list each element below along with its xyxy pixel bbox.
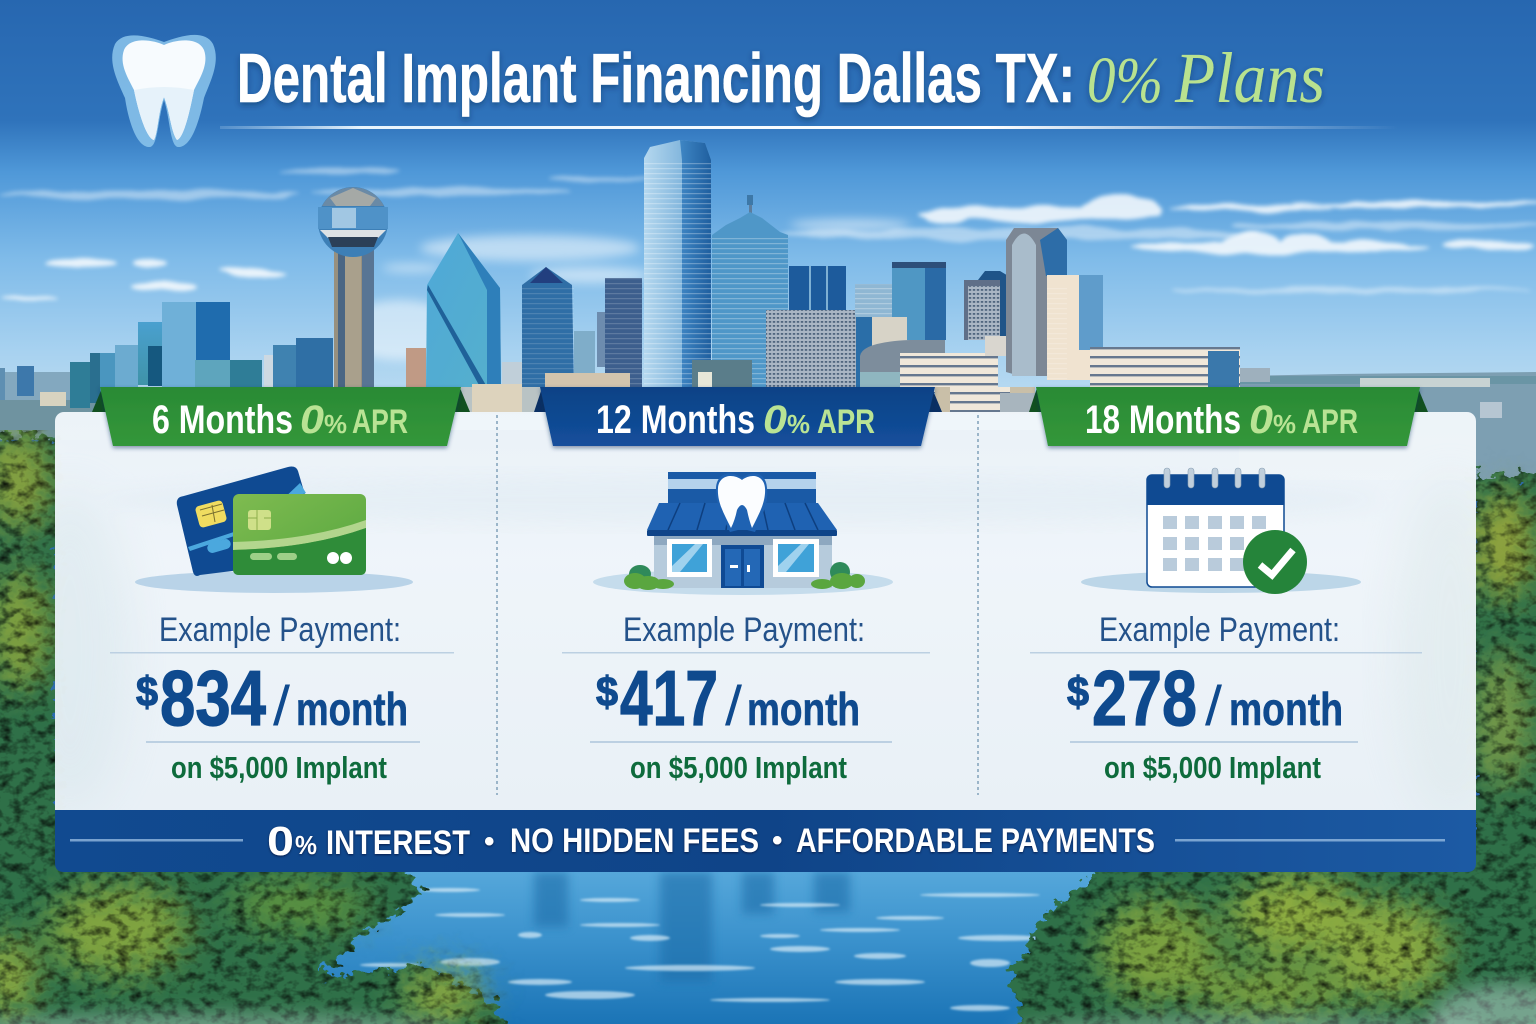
banner text: •	[484, 825, 495, 858]
plan 2 payment text: month	[747, 683, 860, 735]
banner text: •	[772, 824, 783, 857]
banner text	[267, 818, 1155, 864]
ribbon: 12 months: %	[787, 409, 810, 439]
building: Reunion Tower	[318, 187, 388, 387]
plan 1 payment text: $	[136, 668, 158, 715]
icon: tooth logo	[112, 35, 216, 147]
building: Bank of America Plaza	[644, 140, 711, 387]
dashed dividers	[496, 415, 498, 795]
plan 1 payment text	[110, 611, 454, 785]
plan 3 payment text	[1030, 611, 1422, 785]
plan 1 payment text: on $5,000 Implant	[171, 750, 387, 785]
plan 2 payment text: $	[596, 668, 618, 715]
title: Dental Implant Financing Dallas TX:	[237, 39, 1075, 117]
building: spire tower	[692, 195, 788, 387]
title rule	[220, 126, 1400, 129]
ribbon: 6 months: APR	[352, 403, 408, 441]
banner text: NO HIDDEN FEES	[510, 822, 759, 860]
skyline	[70, 140, 1240, 414]
plan 2 payment text: /	[725, 674, 742, 737]
plan 1 payment text: 834	[160, 654, 266, 742]
plan 2 payment text: on $5,000 Implant	[630, 750, 847, 785]
foliage haze	[0, 984, 1536, 1024]
plan 1 payment text: month	[296, 683, 408, 735]
ribbon: 6 months: 6 Months	[152, 398, 293, 442]
ribbon: 18 months: 0	[1249, 398, 1273, 442]
ribbon: 18 months: APR	[1302, 403, 1358, 441]
plan 1 payment text: /	[273, 674, 290, 737]
background: sky	[0, 0, 1536, 430]
building: low rise behind ribbons	[460, 384, 1036, 414]
foliage: left and right trees	[0, 430, 1536, 1024]
building group: left low-rise	[70, 302, 333, 408]
panel: plans card	[10, 412, 1505, 832]
plan 3 payment text: 278	[1092, 654, 1197, 742]
building: towers centre	[502, 267, 642, 387]
plan 3 payment text: Example Payment:	[1099, 611, 1340, 649]
building: Fountain Place	[406, 233, 501, 387]
reflections	[534, 872, 850, 982]
plan 2 payment text: Example Payment:	[623, 611, 865, 649]
ribbon: 12 months: APR	[817, 403, 875, 441]
bottom banner	[55, 810, 1476, 872]
distant horizon	[0, 366, 1536, 480]
plan 2 payment text	[562, 611, 930, 785]
ribbon: 12 months: 0	[763, 398, 787, 442]
banner text: %	[295, 830, 317, 860]
plan 3 payment text: month	[1229, 683, 1343, 735]
ribbon: 12 months	[534, 387, 942, 446]
ribbon: 6 months: 0	[300, 398, 324, 442]
ribbon: 18 months	[1029, 387, 1428, 446]
plan 3 payment text: on $5,000 Implant	[1104, 750, 1321, 785]
ribbon: 6 months: %	[324, 409, 347, 439]
icon: credit cards	[135, 466, 413, 593]
banner text: INTEREST	[326, 824, 470, 862]
banner text: 0	[267, 818, 294, 864]
ribbon: 18 months: %	[1273, 409, 1296, 439]
plan 1 payment text: Example Payment:	[159, 611, 401, 649]
plan 3 payment text: $	[1067, 668, 1089, 715]
ribbon: 6 months	[92, 387, 470, 446]
clouds	[0, 168, 1536, 360]
icon: dental office	[593, 472, 893, 595]
water	[300, 860, 1100, 1024]
banner text: AFFORDABLE PAYMENTS	[796, 822, 1155, 860]
building: right cluster	[766, 228, 1240, 393]
ribbon: 12 months: 12 Months	[596, 398, 755, 442]
title: Plans	[1174, 38, 1325, 118]
plan 2 payment text: 417	[620, 654, 718, 742]
title: 0%	[1087, 44, 1163, 117]
ribbon: 18 months: 18 Months	[1085, 398, 1241, 442]
plan 3 payment text: /	[1205, 674, 1222, 737]
icon: calendar with check	[1081, 468, 1361, 594]
